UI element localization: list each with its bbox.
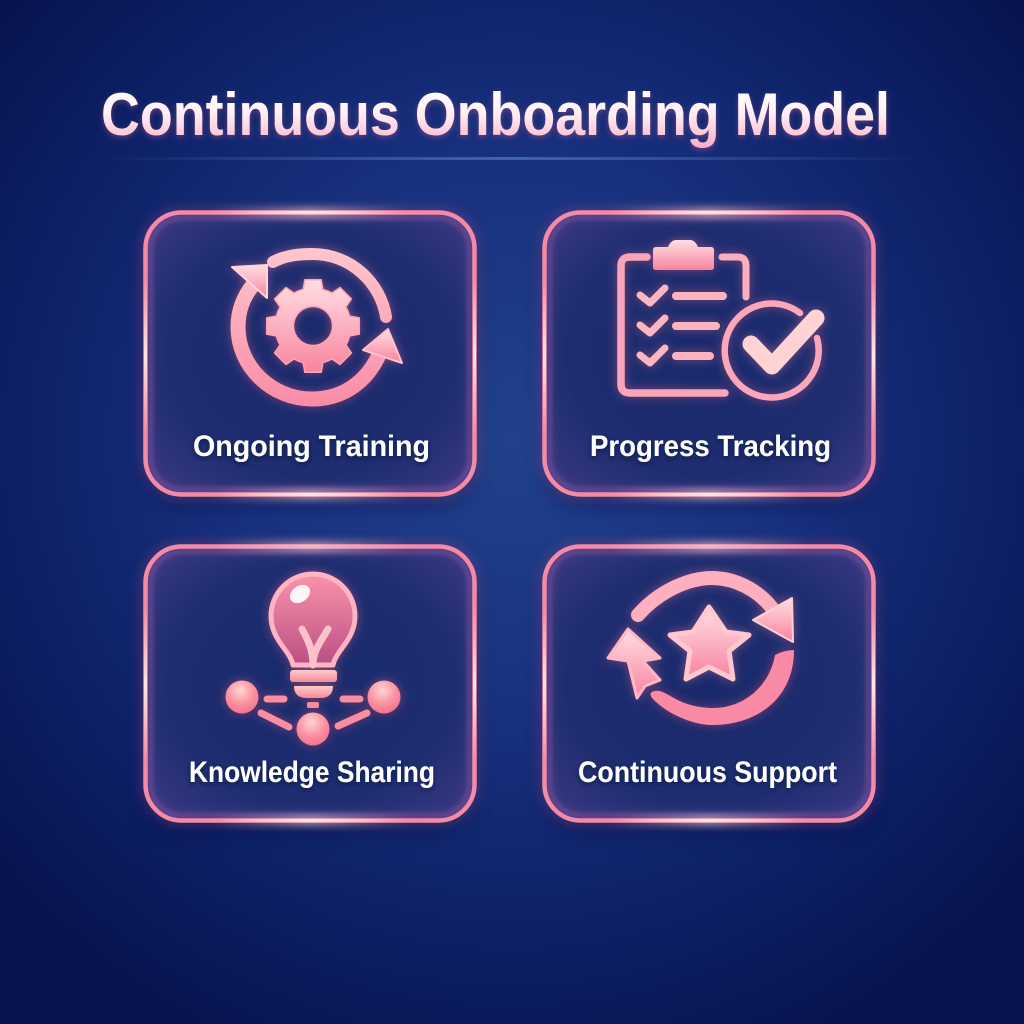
bottom arc [651, 650, 794, 725]
arrowhead: lower right [363, 329, 402, 363]
label: Progress Tracking [590, 430, 831, 463]
node: left [226, 680, 258, 714]
icon: star with cycle arrows [608, 578, 794, 725]
label: Ongoing Training [193, 430, 430, 463]
check circle [725, 304, 819, 398]
node: bottom [296, 712, 330, 746]
panel: ongoing training [144, 208, 476, 504]
title: Continuous Onboarding Model [101, 81, 890, 148]
bulb glass [271, 574, 355, 665]
label: Continuous Support [578, 756, 837, 789]
large check [751, 318, 816, 366]
icon: clipboard checklist [621, 240, 819, 398]
bulb base [290, 670, 337, 708]
star [670, 607, 749, 679]
arrowhead: upper left [232, 265, 267, 298]
panel: knowledge sharing [144, 542, 476, 830]
checkmarks [640, 288, 665, 363]
top arc [638, 578, 772, 615]
panel: continuous support [543, 542, 875, 830]
panel: progress tracking [543, 208, 875, 504]
clipboard clip [653, 240, 714, 270]
bulb highlight [286, 581, 314, 607]
icon: light bulb with connected nodes [226, 574, 400, 746]
icon: gear with cycle arrows [232, 254, 402, 399]
gear [267, 280, 359, 372]
label: Knowledge Sharing [189, 756, 435, 789]
connector dashes [261, 699, 367, 727]
node: right [368, 680, 400, 714]
arrow: left [608, 629, 660, 698]
arrowhead: right [753, 598, 793, 642]
list lines [676, 296, 723, 356]
filament [302, 629, 328, 665]
